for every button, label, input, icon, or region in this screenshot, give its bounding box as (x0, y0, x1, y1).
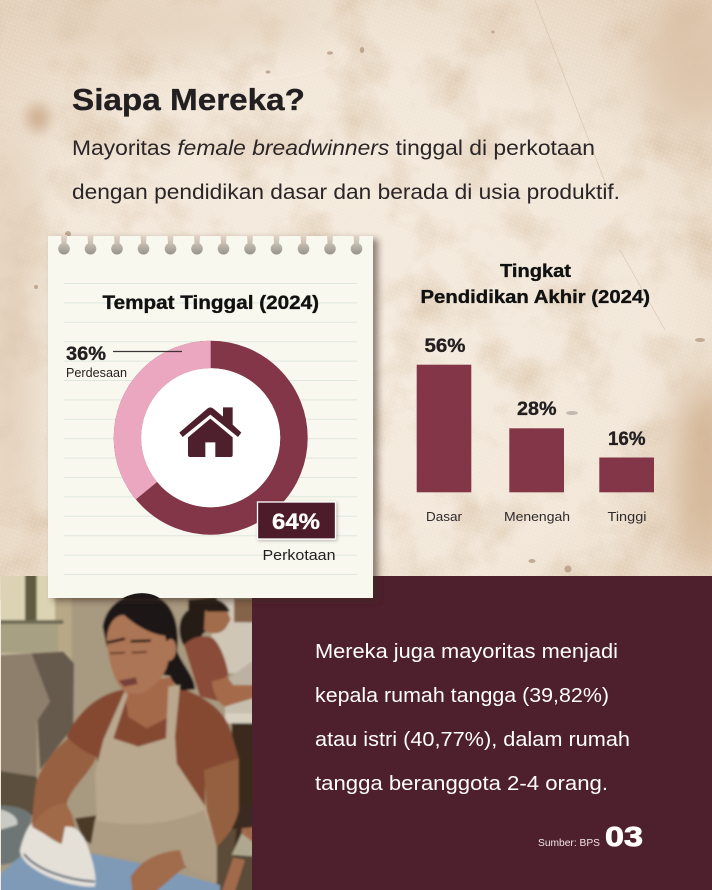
binding holes (58, 235, 362, 255)
chart title: education: Pendidikan Akhir (2024) (420, 286, 650, 307)
bar: Dasar 56%: Dasar (426, 509, 463, 524)
icon: house (179, 407, 241, 457)
callout: 36% Perdesaan (66, 343, 182, 380)
bowl, table, iron (0, 805, 32, 865)
intro text: dengan pendidikan dasar dan berada di usia produktif. (72, 181, 620, 204)
child (234, 824, 252, 857)
slice: Perdesaan 36% (114, 341, 211, 499)
donut chart: place of residence (114, 341, 294, 521)
notebook ruled lines (64, 284, 357, 574)
callout: 64% Perkotaan: 64% (272, 509, 320, 534)
intro text: Mayoritas female breadwinners tinggal di perkotaan (72, 137, 595, 160)
photo overlap: hair crossing the paper edge (122, 593, 160, 598)
source note: Sumber: BPS (538, 838, 600, 849)
callout: 36% Perdesaan: Perdesaan (66, 366, 127, 380)
chart title: education (420, 260, 650, 307)
bar: Dasar 56% (417, 336, 471, 524)
callout: 36% Perdesaan: 36% (66, 343, 106, 365)
bar: Menengah 28% (504, 399, 570, 524)
foreground face (107, 615, 176, 694)
heading: Siapa Mereka? (72, 82, 305, 117)
bar: Menengah 28%: Menengah (504, 509, 570, 524)
foreground arms (30, 738, 97, 826)
body text on dark panel: tangga beranggota 2-4 orang. (315, 773, 608, 795)
bar: Menengah 28%: 28% (517, 399, 557, 420)
chart title: education: Tingkat (500, 260, 571, 281)
bar: Dasar 56%: 56% (424, 336, 466, 357)
foreground apron (94, 683, 216, 842)
bar: Tinggi 16%: Tinggi (608, 509, 647, 524)
panel: notebook paper (48, 235, 373, 598)
body text on dark panel: kepala rumah tangga (39,82%) (315, 685, 609, 707)
page number: 03 (605, 821, 643, 852)
intro text (72, 137, 620, 204)
foreground shirt (67, 687, 239, 810)
foreground hair (103, 593, 178, 677)
background woman (179, 597, 220, 645)
foreground neck (123, 677, 175, 729)
bar: Tinggi 16%: 16% (608, 429, 646, 450)
callout: 64% Perkotaan (258, 502, 336, 564)
aged paper background (0, 0, 712, 600)
body text on dark panel: atau istri (40,77%), dalam rumah (315, 729, 630, 751)
body text on dark panel: Mereka juga mayoritas menjadi (315, 641, 618, 663)
body text on dark panel (315, 641, 630, 795)
panel: dark text block (252, 576, 712, 890)
callout: 64% Perkotaan: Perkotaan (262, 547, 336, 564)
ponytail (170, 651, 196, 692)
bar: Tinggi 16% (599, 429, 654, 524)
bar chart: education level (417, 336, 654, 524)
donut centre (141, 368, 280, 507)
photo: woman ironing (0, 563, 260, 890)
chart title: residence: Tempat Tinggal (2024) (102, 293, 319, 314)
